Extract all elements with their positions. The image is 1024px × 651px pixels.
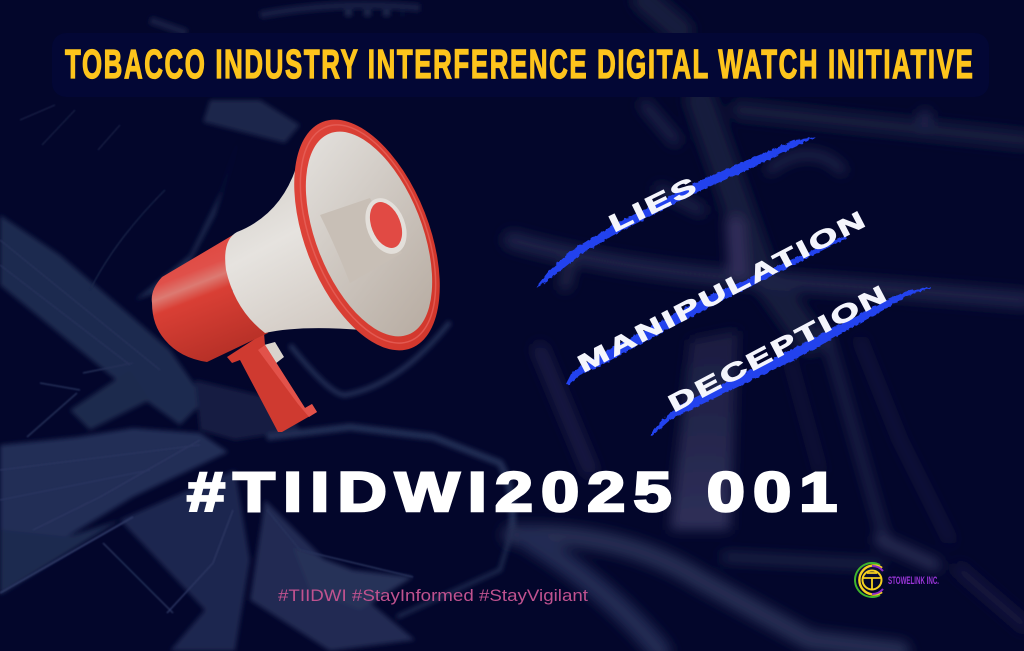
background fibres right (512, 0, 1024, 651)
megaphone trigger (264, 342, 284, 364)
hashtags: #TIIDWI #StayInformed #StayVigilant (278, 586, 588, 605)
logo: Stowelink Inc.: STOWELINK INC. (888, 575, 939, 587)
megaphone handle (227, 333, 317, 432)
title banner: TOBACCO INDUSTRY INTERFERENCE DIGITAL WATCH INITIATIVE (65, 42, 973, 88)
megaphone body (152, 232, 268, 362)
logo: Stowelink Inc. (855, 563, 939, 597)
megaphone rim (265, 99, 469, 371)
megaphone rim highlight (273, 106, 463, 362)
brush stroke: manipulation (566, 235, 847, 385)
brush stroke: lies (536, 137, 816, 287)
title banner (52, 33, 989, 97)
background fibres left (0, 5, 512, 651)
label: deception: DECEPTION (664, 281, 890, 417)
label: manipulation: MANIPULATION (573, 206, 869, 377)
logo mark (855, 563, 883, 597)
campaign code heading: #TIIDWI2025 001 (187, 461, 837, 524)
brush stroke: deception (650, 287, 931, 436)
background fine fibres (0, 105, 413, 613)
label: lies: LIES (605, 172, 700, 237)
icon: red megaphone (152, 99, 469, 432)
megaphone horn (225, 168, 380, 333)
megaphone dish (280, 114, 458, 354)
megaphone driver (320, 192, 414, 283)
